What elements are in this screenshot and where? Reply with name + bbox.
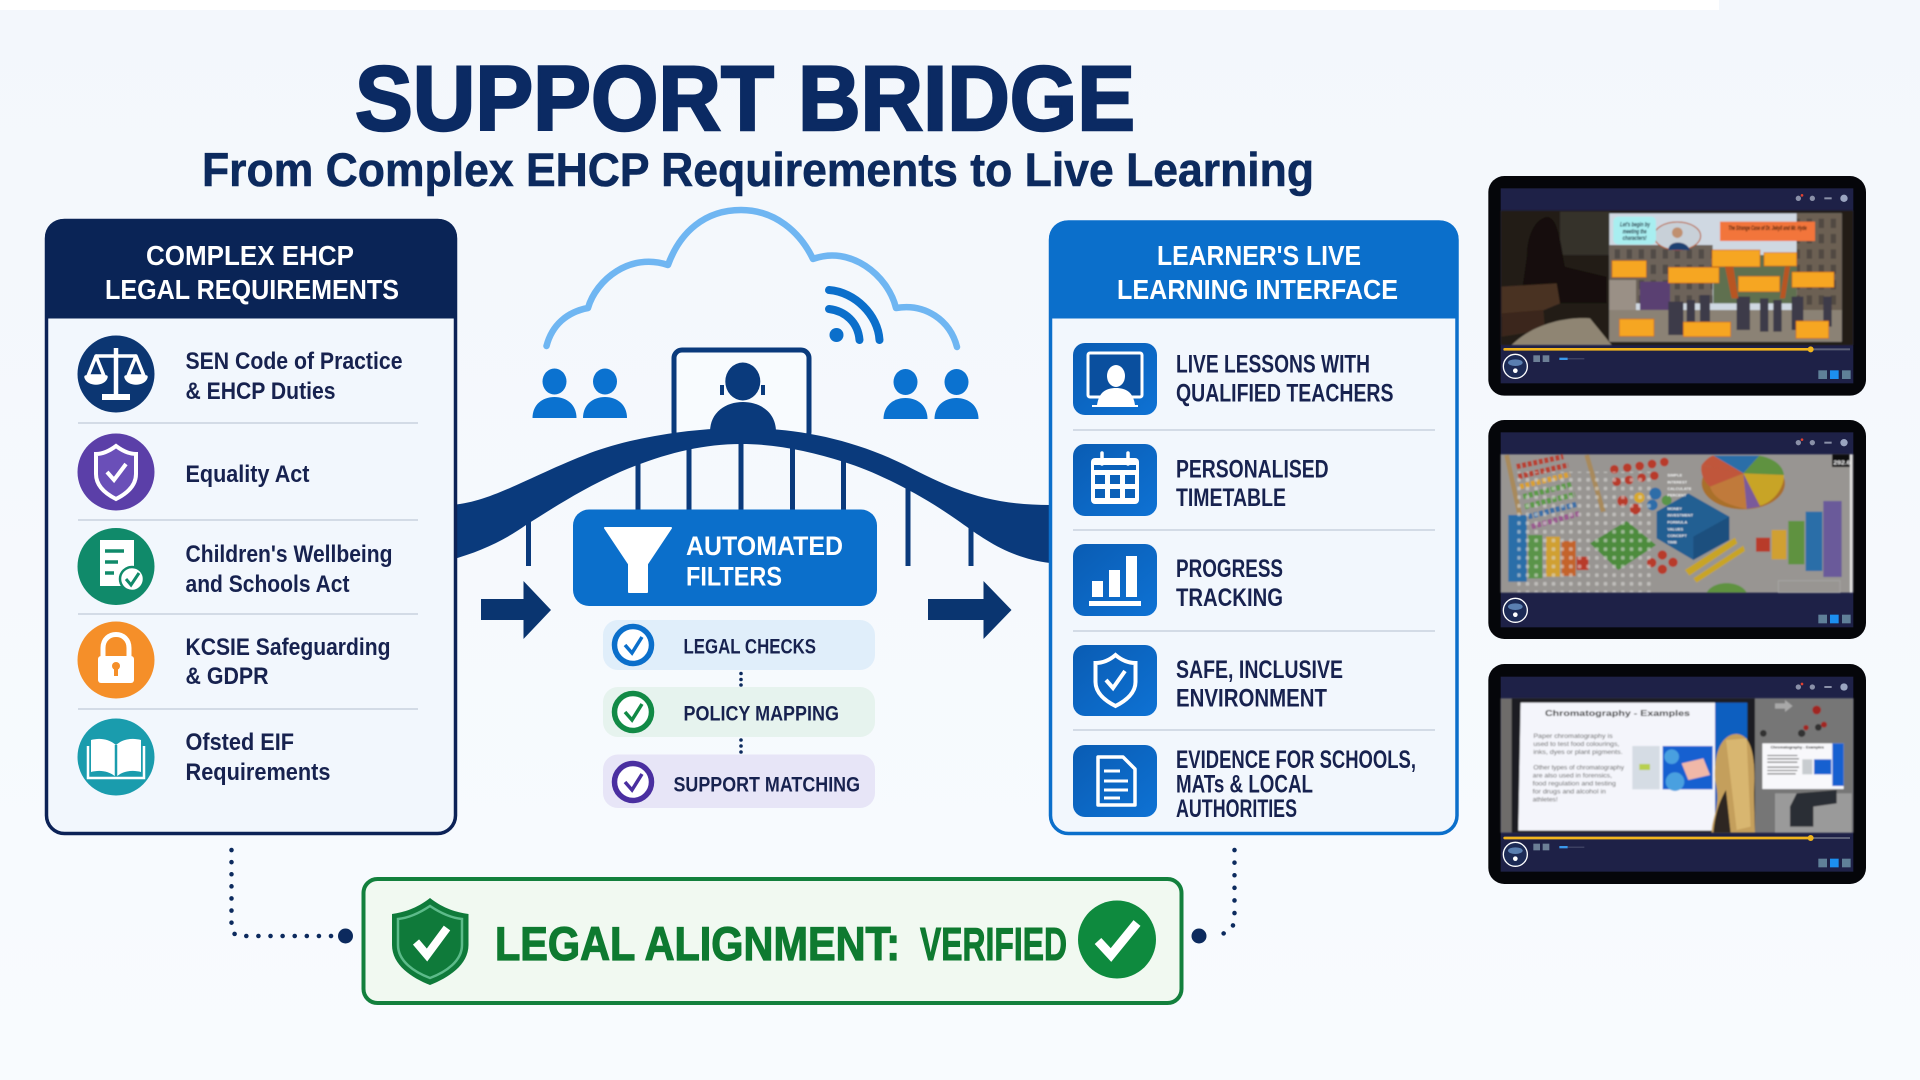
player controls bbox=[1503, 438, 1851, 623]
classroom slide scene: are also used in forensics, bbox=[1533, 774, 1612, 780]
dotted connector left bbox=[232, 850, 353, 944]
player controls bbox=[1503, 194, 1851, 379]
maths manipulatives scene: INTEREST bbox=[1667, 479, 1688, 484]
icon: document check bbox=[78, 528, 154, 605]
row: progress tracking: PROGRESS bbox=[1176, 555, 1283, 583]
panel: complex EHCP legal requirements bbox=[45, 219, 457, 834]
row: evidence: EVIDENCE FOR SCHOOLS, bbox=[1176, 746, 1416, 774]
icon: funnel bbox=[605, 528, 671, 592]
pill: policy mapping: POLICY MAPPING bbox=[684, 702, 839, 726]
filter steps bbox=[603, 620, 875, 808]
maths manipulatives scene: MONEY bbox=[1667, 506, 1682, 511]
screenshot: maths lesson tablet bbox=[1488, 420, 1866, 639]
icon: open book bbox=[78, 718, 154, 796]
row: personalised timetable bbox=[1073, 444, 1329, 516]
row: personalised timetable: PERSONALISED bbox=[1176, 456, 1329, 484]
maths manipulatives scene: VALUES bbox=[1667, 526, 1684, 531]
player controls bbox=[1503, 683, 1851, 867]
classroom slide scene bbox=[1501, 698, 1853, 833]
classroom slide scene: Other types of chromatography bbox=[1533, 766, 1624, 772]
icon: purple shield bbox=[78, 434, 154, 510]
maths manipulatives scene: INVESTMENT bbox=[1667, 513, 1694, 518]
row: evidence: AUTHORITIES bbox=[1176, 795, 1297, 823]
screenshot: literature lesson tablet bbox=[1488, 176, 1866, 396]
classroom slide scene: Paper chromatography is bbox=[1533, 734, 1613, 740]
pill: support matching bbox=[603, 754, 875, 808]
icon: learners right bbox=[884, 369, 978, 419]
row: Ofsted EIF Requirements: Requirements bbox=[186, 759, 330, 786]
row: live lessons bbox=[1073, 343, 1394, 415]
subtitle: From Complex EHCP Requirements to Live Learning bbox=[202, 143, 1314, 196]
icon: shield bbox=[1073, 645, 1157, 716]
lesson scene: The Strange Case of Dr. Jekyll and Mr. Hyde bbox=[1728, 225, 1807, 232]
automated filters box: FILTERS bbox=[686, 562, 782, 592]
icon: calendar bbox=[1073, 444, 1157, 516]
row: Ofsted EIF Requirements bbox=[78, 718, 330, 796]
illustration: cloud, bridge and presenter bbox=[450, 210, 1050, 566]
row: Children's Wellbeing and Schools Act bbox=[78, 528, 392, 605]
automated filters box bbox=[573, 510, 877, 606]
panel header: LEARNER'S LIVE bbox=[1157, 240, 1361, 271]
maths manipulatives scene: CALCULATE bbox=[1667, 486, 1692, 491]
lesson scene bbox=[1501, 211, 1853, 345]
panel header bbox=[1049, 220, 1458, 318]
arrow: left to filters bbox=[481, 581, 551, 639]
panel: learner's live learning interface bbox=[1049, 220, 1458, 834]
row: personalised timetable: TIMETABLE bbox=[1176, 484, 1286, 512]
row: progress tracking: TRACKING bbox=[1176, 584, 1283, 612]
classroom slide scene: inks, dyes or plant pigments. bbox=[1533, 750, 1623, 756]
row: KCSIE Safeguarding and GDPR: & GDPR bbox=[186, 663, 268, 690]
title: SUPPORT BRIDGE bbox=[355, 48, 1135, 150]
row: live lessons: LIVE LESSONS WITH bbox=[1176, 350, 1370, 378]
maths manipulatives scene: PERCENT bbox=[1667, 493, 1687, 498]
pill: policy mapping bbox=[603, 687, 875, 737]
pill: legal checks bbox=[603, 620, 875, 670]
banner: legal alignment verified: LEGAL ALIGNMENT: bbox=[495, 917, 900, 970]
classroom slide scene: food regulation and testing bbox=[1533, 782, 1616, 788]
row: evidence bbox=[1073, 745, 1416, 823]
row: evidence: MATs & LOCAL bbox=[1176, 770, 1313, 798]
icon: padlock bbox=[78, 622, 154, 698]
dotted connector right bbox=[1192, 850, 1234, 944]
row: progress tracking bbox=[1073, 544, 1283, 616]
classroom slide scene: Chromatography - Examples bbox=[1545, 708, 1690, 718]
row: SEN Code of Practice bbox=[78, 336, 402, 412]
icon: green check circle bbox=[1078, 900, 1156, 978]
classroom slide scene: Chromatography - Examples bbox=[1771, 746, 1824, 750]
bridge arch bbox=[450, 428, 1050, 563]
icon: teacher on screen bbox=[674, 350, 809, 440]
icon: document bbox=[1073, 745, 1157, 817]
panel header: LEARNING INTERFACE bbox=[1117, 274, 1398, 305]
icon: bar chart bbox=[1073, 544, 1157, 616]
arrow: filters to right bbox=[928, 581, 1012, 639]
screenshot: chromatography lesson tablet bbox=[1488, 664, 1866, 884]
row: Children's Wellbeing and Schools Act: and Schools Act bbox=[186, 571, 350, 598]
maths manipulatives scene: CONCEPT bbox=[1667, 533, 1687, 538]
row: SEN Code of Practice: & EHCP Duties bbox=[186, 378, 336, 405]
row: Equality Act: Equality Act bbox=[186, 461, 310, 488]
icon: monitor with person bbox=[1073, 343, 1157, 415]
icon: green shield bbox=[392, 898, 468, 985]
banner: legal alignment verified: VERIFIED bbox=[920, 918, 1067, 970]
maths manipulatives scene: TIME bbox=[1667, 540, 1677, 545]
row: live lessons: QUALIFIED TEACHERS bbox=[1176, 380, 1394, 408]
row: Equality Act bbox=[78, 434, 310, 510]
lesson scene: Let's begin by bbox=[1620, 223, 1650, 229]
icon: cloud outline bbox=[546, 210, 957, 347]
row: Children's Wellbeing and Schools Act: Children's Wellbeing bbox=[186, 541, 392, 568]
bridge hangers bbox=[526, 436, 974, 566]
lesson scene: characters! bbox=[1623, 236, 1647, 242]
automated filters box: AUTOMATED bbox=[686, 531, 843, 561]
panel header: COMPLEX EHCP bbox=[146, 240, 354, 271]
row: Ofsted EIF Requirements: Ofsted EIF bbox=[186, 729, 294, 756]
panel header bbox=[45, 219, 457, 318]
row: safe, inclusive environment: SAFE, INCLUSIVE bbox=[1176, 656, 1343, 684]
lesson scene: meeting the bbox=[1623, 229, 1647, 235]
icon: learners left bbox=[532, 368, 627, 418]
panel header: LEGAL REQUIREMENTS bbox=[105, 274, 399, 305]
row: KCSIE Safeguarding and GDPR: KCSIE Safeguarding bbox=[186, 634, 390, 661]
classroom slide scene: athletes! bbox=[1533, 797, 1558, 803]
icon: scales bbox=[78, 336, 154, 412]
classroom slide scene: used to test food colourings, bbox=[1533, 742, 1620, 748]
row: safe, inclusive environment bbox=[1073, 645, 1343, 716]
maths manipulatives scene: 292.6 bbox=[1833, 460, 1851, 466]
maths manipulatives scene: SIMPLE bbox=[1667, 473, 1683, 478]
banner: legal alignment verified bbox=[364, 879, 1182, 1003]
row: SEN Code of Practice: SEN Code of Practice bbox=[186, 348, 402, 375]
pill: legal checks: LEGAL CHECKS bbox=[684, 636, 816, 658]
icon: wifi signal bbox=[829, 290, 880, 342]
pill: support matching: SUPPORT MATCHING bbox=[674, 774, 860, 796]
row: safe, inclusive environment: ENVIRONMENT bbox=[1176, 684, 1327, 712]
classroom slide scene: for drugs and alcohol in bbox=[1533, 790, 1606, 796]
row: KCSIE Safeguarding and GDPR bbox=[78, 622, 390, 698]
maths manipulatives scene: FORMULA bbox=[1667, 520, 1687, 525]
maths manipulatives scene bbox=[1501, 454, 1853, 593]
